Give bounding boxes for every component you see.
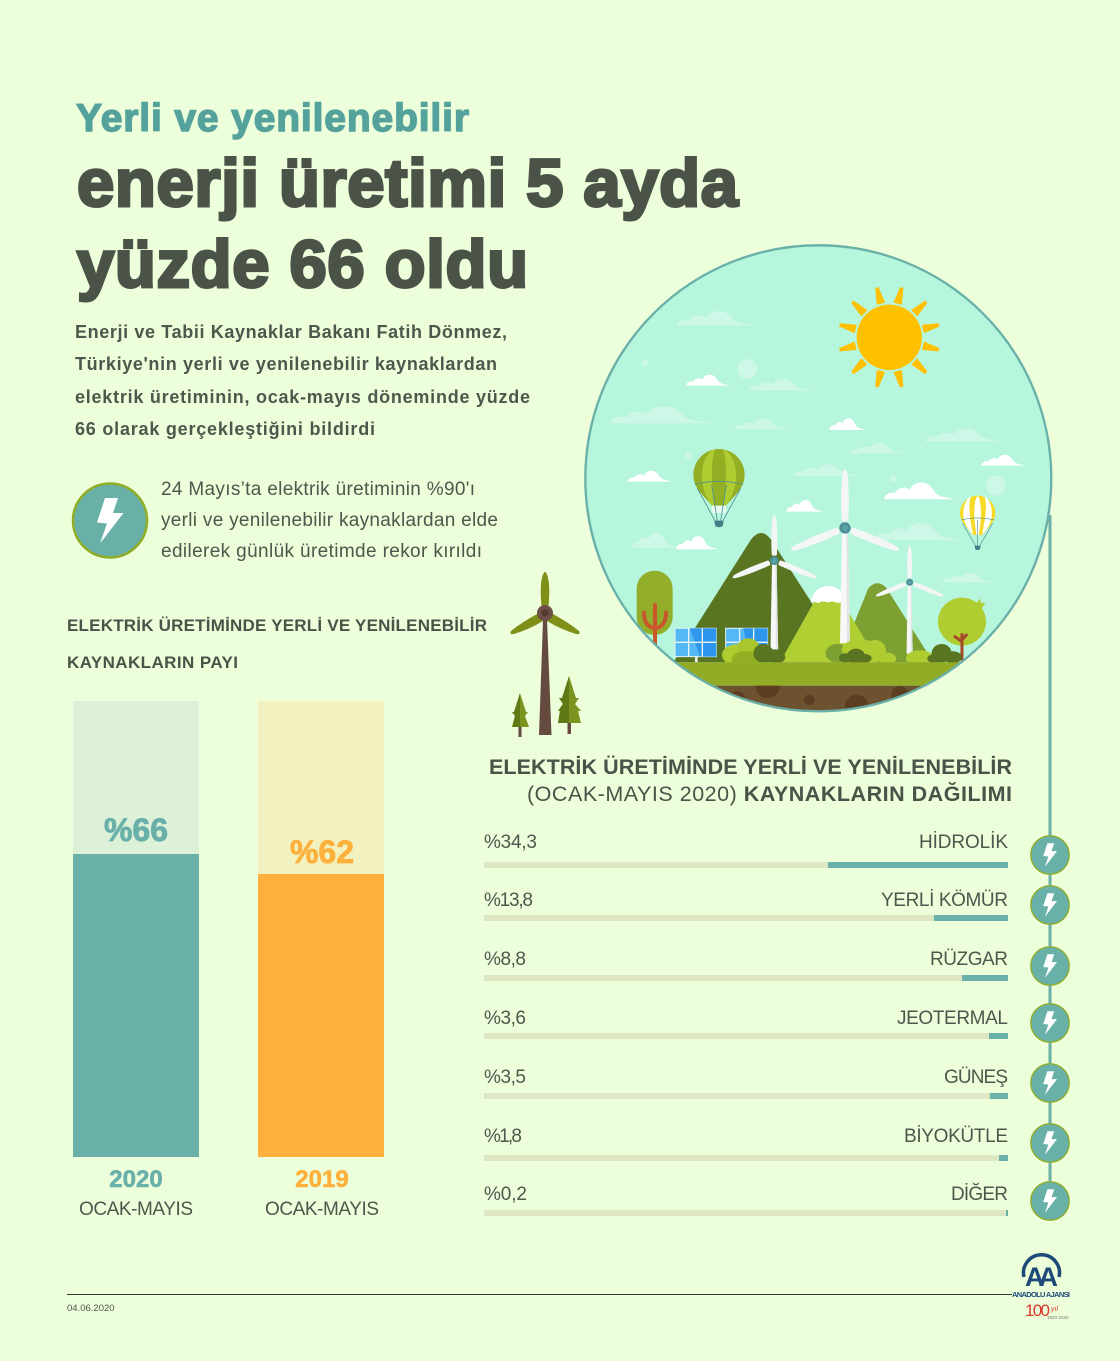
row: Jeotermal: %3,6 [484,1008,526,1029]
pale clouds [610,311,1006,582]
title: enerji üretimi 5 ayda [77,146,739,221]
title: Yerli ve yenilenebilir [76,97,469,140]
callout text: 24 Mayıs’ta elektrik üretiminin %90'ı [161,479,475,500]
white clouds [628,375,1026,549]
connector line [1048,515,1052,1201]
callout text [161,479,498,562]
row: Güneş: %3,5 [484,1067,526,1088]
heading: share chart: KAYNAKLARIN PAYI [67,653,238,672]
heading: distribution chart: (OCAK-MAYIS 2020) KAYNAKLARIN DAĞILIMI [527,781,1012,806]
yellow balloon [960,496,995,550]
footer rule [67,1294,1012,1295]
row: Hidrolik: HİDROLİK [919,832,1008,853]
logo: Anadolu Ajansı: AA [1025,1262,1058,1292]
row: Yerli kömür [484,890,1008,921]
row: Biyokütle [484,1126,1008,1161]
row: Hidrolik [484,832,1008,868]
sun [838,286,940,388]
intro paragraph: elektrik üretiminin, ocak-mayıs döneminde yüzde [75,387,530,407]
callout text: yerli ve yenilenebilir kaynaklardan elde [161,510,498,531]
turbines [789,469,901,643]
green balloon [693,449,745,527]
intro paragraph: Enerji ve Tabii Kaynaklar Bakanı Fatih Dönmez, [75,322,507,342]
logo: Anadolu Ajansı: yıl [1050,1306,1058,1313]
heading: share chart: ELEKTRİK ÜRETİMİNDE YERLİ VE YENİLENEBİLİR [67,616,487,635]
heading: distribution chart: ELEKTRİK ÜRETİMİNDE YERLİ VE YENİLENEBİLİR [489,754,1012,779]
icon: small wind turbine with trees [510,572,581,737]
row: Biyokütle: %1,8 [484,1126,522,1147]
row: Diğer: DİĞER [951,1183,1008,1205]
title: yüzde 66 oldu [77,227,528,302]
logo: Anadolu Ajansı [1012,1255,1070,1320]
illustration: renewable energy landscape [580,245,1060,719]
bar chart: 2020: %66 [104,812,168,848]
ground [677,662,960,710]
icon: lightning callout badge [73,484,147,558]
row: Biyokütle: BİYOKÜTLE [904,1126,1008,1147]
logo: Anadolu Ajansı: ANADOLU AJANSI [1012,1290,1070,1299]
row: Diğer [484,1183,1008,1216]
row: Rüzgar [484,949,1008,981]
bar chart: 2019 [258,701,384,1220]
bar chart: 2020: 2020 [109,1166,163,1193]
row: Yerli kömür: YERLİ KÖMÜR [881,890,1008,911]
heading: share chart [67,616,487,672]
solar panels [675,628,768,662]
mountains [673,533,850,662]
logo: Anadolu Ajansı: 100 [1025,1301,1050,1320]
intro paragraph [75,322,530,439]
left tree [637,571,673,635]
callout text: edilerek günlük üretimde rekor kırıldı [161,541,482,562]
row: Jeotermal: JEOTERMAL [897,1008,1008,1029]
bar chart: 2020: OCAK-MAYIS [79,1199,193,1220]
row: Jeotermal [484,1008,1008,1039]
heading: distribution chart [489,754,1012,806]
bar chart: 2019: 2019 [295,1166,349,1193]
bar chart: 2019: %62 [290,834,354,870]
row: Hidrolik: %34,3 [484,832,537,853]
right tree [938,598,986,646]
bushes [722,638,962,662]
row: Rüzgar: %8,8 [484,949,526,970]
row: Rüzgar: RÜZGAR [930,949,1008,970]
intro paragraph: Türkiye'nin yerli ve yenilenebilir kaynaklardan [75,354,497,374]
icons: lightning badges [1031,836,1069,1220]
bar chart: 2020 [73,701,199,1220]
row: Güneş [484,1067,1008,1099]
date: 04.06.2020 [67,1303,115,1314]
bar chart: 2019: OCAK-MAYIS [265,1199,379,1220]
row: Güneş: GÜNEŞ [944,1067,1008,1088]
title [76,97,739,302]
row: Yerli kömür: %13,8 [484,890,533,911]
row: Diğer: %0,2 [484,1184,527,1205]
intro paragraph: 66 olarak gerçekleştiğini bildirdi [75,419,375,439]
logo: Anadolu Ajansı: 1920-2020 [1047,1315,1069,1320]
